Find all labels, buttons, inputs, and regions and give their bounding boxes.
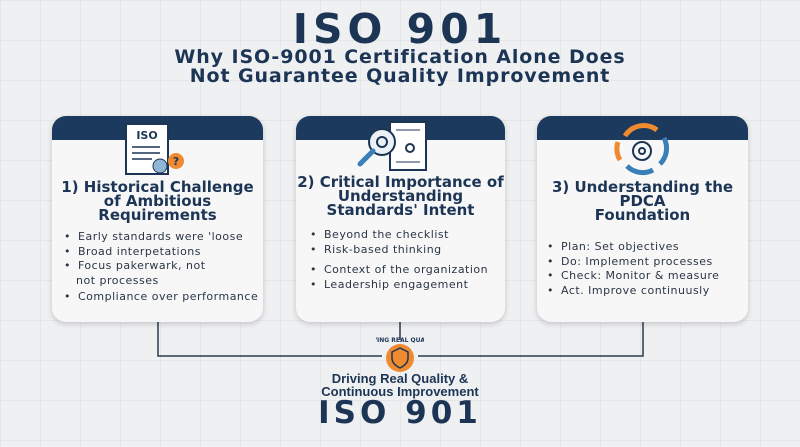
panel: historical challenge: Early standards were 'loose (78, 230, 243, 243)
panel: historical challenge: Compliance over performance (78, 290, 258, 303)
panel: PDCA: 3) Understanding the (552, 178, 733, 196)
panel: historical challenge: Requirements (98, 206, 217, 224)
panel: historical challenge: Focus pakerwark, not (78, 259, 206, 272)
footer text: Driving Real Quality & (332, 371, 468, 386)
title: ISO 901 (293, 5, 507, 53)
panel: standards intent: Risk-based thinking (324, 242, 442, 256)
subtitle: Not Guarantee Quality Improvement (190, 65, 610, 87)
footer text (321, 371, 479, 399)
icon: quality badge (376, 337, 424, 372)
icon: ISO document: ISO (136, 129, 158, 142)
panel: PDCA: Act. Improve continuusly (561, 284, 710, 296)
icon: ISO document (125, 123, 184, 175)
icon: ISO document: ? (173, 155, 179, 168)
panel: historical challenge: Broad interpetations (78, 244, 201, 258)
panel: PDCA (537, 116, 748, 322)
subtitle: Why ISO-9001 Certification Alone Does (174, 46, 626, 68)
panel: PDCA: Check: Monitor & measure (561, 269, 719, 282)
panel: standards intent: Understanding (338, 187, 463, 205)
panel: standards intent: Context of the organization (324, 263, 488, 276)
panel: standards intent: Leadership engagement (324, 278, 468, 290)
panel: historical challenge: not processes (76, 274, 159, 286)
panel: PDCA: Foundation (595, 206, 690, 224)
panel: standards intent: 2) Critical Importance of (297, 173, 504, 191)
panel: historical challenge: of Ambitious (104, 192, 211, 210)
panel: standards intent (296, 116, 505, 322)
footer text: Continuous Improvement (321, 384, 479, 399)
footer title: ISO 901 (318, 395, 482, 431)
subtitle (174, 46, 626, 87)
panel: PDCA: PDCA (619, 192, 666, 210)
panel: standards intent: Beyond the checklist (324, 228, 449, 241)
panel: standards intent: Standards' Intent (327, 201, 474, 219)
icon: PDCA cycle (614, 123, 670, 176)
panel: historical challenge: 1) Historical Challenge (61, 178, 254, 196)
panel: historical challenge (52, 116, 263, 322)
panel: PDCA: Do: Implement processes (561, 254, 713, 268)
icon: magnifier and document (358, 121, 427, 171)
panel: PDCA: Plan: Set objectives (561, 240, 679, 253)
